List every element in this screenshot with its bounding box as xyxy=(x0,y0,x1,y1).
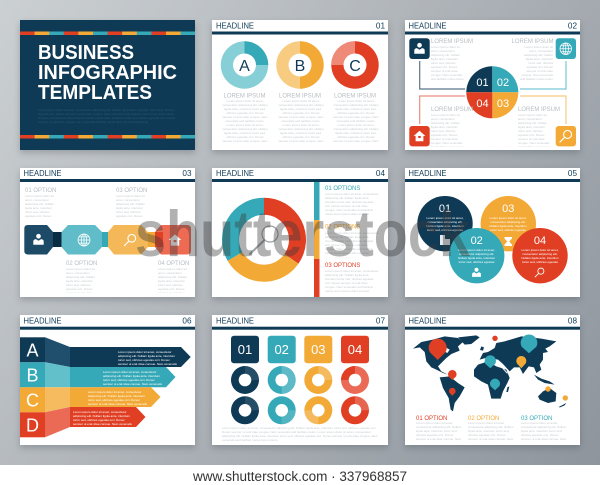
cover title: BUSINESS xyxy=(38,41,134,64)
header 04: 04 xyxy=(376,169,385,178)
arrow D: D xyxy=(26,416,39,436)
icon: magnifier xyxy=(124,234,136,246)
ring row 1 xyxy=(231,366,369,394)
circle 03: 03 xyxy=(502,203,514,215)
footer paragraph: Lorem ipsum dolor sit amet, consectetur adipiscing elit. Nullam ligula ante, interdum tortor sed, ultricies egestas orci. Donec semper ut erat vitae congue. Nam venenatis and facilisis metus. Lorem ipsum dolor sit amet, consectetur adipiscing elit. Nullam ligula ante, interdum tortor sed, ultricies egestas orci. Donec semper ut erat vitae congue. Nam venenatis and facilisis metus lorem ipsum. xyxy=(222,426,378,442)
option 02 text: 02 OPTIONS xyxy=(325,224,360,230)
vertical colour bar xyxy=(314,182,320,297)
header 01: 01 xyxy=(376,21,385,30)
icon: house xyxy=(409,126,430,146)
column A text: LOREM IPSUM xyxy=(223,94,266,100)
ring A: A xyxy=(239,58,250,75)
header 06: HEADLINE xyxy=(24,316,62,325)
quadrant circle: 03 xyxy=(497,98,509,110)
header 05: 05 xyxy=(568,169,577,178)
option 01 text xyxy=(25,188,59,218)
column C text: LOREM IPSUM xyxy=(334,94,376,100)
number tiles xyxy=(231,336,369,363)
icon: person xyxy=(33,234,44,245)
watermark: shutterstock xyxy=(135,197,471,270)
header 02 xyxy=(405,21,580,34)
column B text: LOREM IPSUM xyxy=(279,94,321,100)
panel: 02 quadrant circle xyxy=(405,20,580,150)
panel: cover xyxy=(20,20,195,150)
text top right xyxy=(511,39,554,80)
arrow B xyxy=(20,362,176,387)
panel: 06 arrows xyxy=(20,315,195,445)
header 01: HEADLINE xyxy=(216,21,254,30)
map pins xyxy=(429,334,568,401)
number tiles: 04 xyxy=(348,342,362,357)
top colour stripe xyxy=(20,32,195,35)
panel: 04 donut chart xyxy=(212,168,388,297)
cover title xyxy=(38,41,177,104)
header 08: 08 xyxy=(568,316,577,325)
panel: 01 rings xyxy=(212,20,388,150)
header 05 xyxy=(405,169,580,182)
arrow C: C xyxy=(26,390,39,410)
option 03 text: 03 OPTION xyxy=(116,188,147,194)
quadrant circle: 04 xyxy=(476,98,489,110)
circle 02 xyxy=(449,228,504,283)
ring row 2 xyxy=(231,396,369,424)
header 03: 03 xyxy=(182,169,192,178)
arrow A xyxy=(20,337,191,367)
footer credit: www.shutterstock.com · 337968857 xyxy=(193,469,407,484)
header 02: HEADLINE xyxy=(408,21,447,30)
header 08 xyxy=(405,316,580,330)
header 04 xyxy=(212,169,388,182)
option 03 text: 03 OPTIONS xyxy=(325,263,360,269)
ring B xyxy=(276,41,324,89)
panel: 05 overlapping circles xyxy=(405,168,580,297)
header 07 xyxy=(212,316,388,330)
header 01 xyxy=(212,21,388,34)
panel: 07 number tiles xyxy=(212,315,388,445)
text top left: LOREM IPSUM xyxy=(431,39,473,45)
bottom colour stripe xyxy=(20,135,195,138)
icon: magnifier xyxy=(556,126,576,146)
icon: magnifier xyxy=(250,226,278,254)
map option 01: 01 OPTION xyxy=(416,416,447,422)
circle 04 xyxy=(512,228,568,283)
header 04: HEADLINE xyxy=(216,169,254,178)
header 03: HEADLINE xyxy=(24,169,62,178)
quadrant circle: 01 xyxy=(476,77,489,89)
header 07: 07 xyxy=(376,316,385,325)
donut chart xyxy=(222,198,306,282)
option 04 text: 04 OPTION xyxy=(158,261,189,267)
header 02: 02 xyxy=(568,21,577,30)
header 03 xyxy=(20,169,195,182)
number tiles: 02 xyxy=(274,342,289,357)
map option 03: 03 OPTION xyxy=(521,416,552,422)
circle 02: 02 xyxy=(471,235,483,247)
ring C: C xyxy=(349,58,361,75)
icon: house xyxy=(169,234,181,246)
arrow D xyxy=(20,407,146,437)
header 07: HEADLINE xyxy=(216,316,254,325)
option 02 text: 02 OPTION xyxy=(66,261,97,267)
ring B: B xyxy=(295,58,305,75)
circle 01 xyxy=(417,196,473,251)
text bottom right xyxy=(518,107,560,146)
option 01 text: 01 OPTIONS xyxy=(325,186,360,192)
header 06: 06 xyxy=(182,316,192,325)
number tiles: 01 xyxy=(238,342,252,357)
cover title: INFOGRAPHIC xyxy=(38,61,177,84)
quadrant circle xyxy=(466,66,518,118)
text top left xyxy=(431,39,473,80)
text bottom left xyxy=(431,107,473,146)
arrow C xyxy=(20,387,160,412)
cover paragraph: Lorem ipsum dolor sit amet, consectetur adipiscing elit. Nullam ligula ante, interdum tortor sed, ultricies egestas orci. Donec semper ut erat vitae congue. Nam venenatis and facilisis metus lorem ipsum dolor sit amet, consectetur adipiscing elit. Nullam ligula ante, interdum tortor sed ultricies egestas orci. Donec semper ut erat vitae congue nam venenatis facilisis metus dolor sit amet adipiscing. xyxy=(38,108,175,124)
number tiles: 03 xyxy=(311,342,326,357)
cover title: TEMPLATES xyxy=(38,81,152,104)
circle 03 xyxy=(481,196,536,251)
circle 01: 01 xyxy=(439,203,451,215)
text top right: LOREM IPSUM xyxy=(511,39,554,45)
ring A xyxy=(221,41,268,89)
header 05: HEADLINE xyxy=(408,169,447,178)
icon: globe xyxy=(556,38,576,59)
text bottom right: LOREM IPSUM xyxy=(518,107,560,113)
quadrant circle: 02 xyxy=(497,77,509,89)
text bottom left: LOREM IPSUM xyxy=(431,107,473,113)
process band xyxy=(24,225,191,254)
circle 04: 04 xyxy=(534,235,546,247)
arrow B: B xyxy=(26,366,39,386)
icon: person xyxy=(409,38,430,59)
icon: globe xyxy=(78,234,90,246)
panel: 03 process band xyxy=(20,168,195,297)
world map xyxy=(413,335,566,411)
header 08: HEADLINE xyxy=(408,316,447,325)
option 03 text xyxy=(116,188,150,218)
ring C xyxy=(331,41,379,89)
map option 02: 02 OPTION xyxy=(468,416,499,422)
option 01 text: 01 OPTION xyxy=(25,188,56,194)
header 06 xyxy=(20,316,195,330)
arrow A: A xyxy=(26,340,39,360)
connector lines xyxy=(420,61,566,124)
panel: 08 world map xyxy=(405,315,580,445)
